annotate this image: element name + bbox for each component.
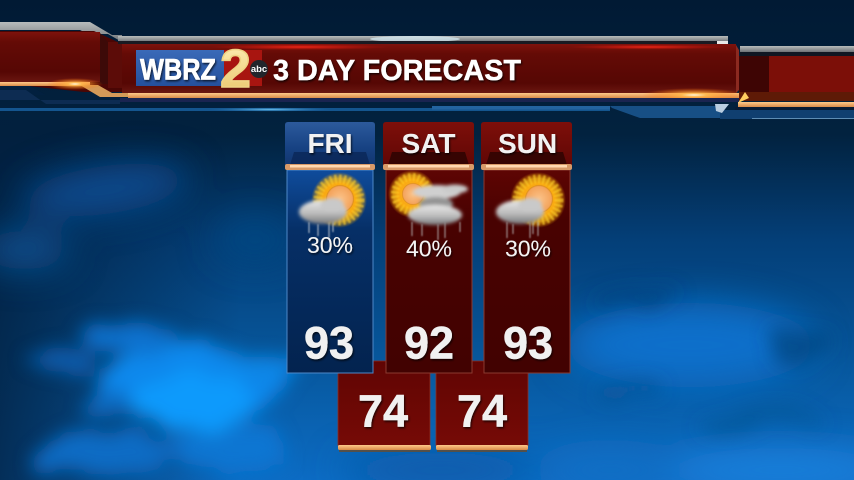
SAT header: SAT bbox=[402, 128, 455, 159]
FRI header bbox=[285, 122, 375, 165]
SAT body bbox=[386, 170, 472, 373]
title banner bbox=[0, 22, 854, 119]
low value: 74 bbox=[457, 386, 507, 436]
logo: WBRZ 2 abc bbox=[136, 39, 268, 99]
icon: sun behind cloud with rain bbox=[496, 172, 566, 238]
SAT high: 92 bbox=[404, 318, 454, 368]
SUN precipitation: 30% bbox=[505, 236, 551, 262]
SUN high: 93 bbox=[503, 318, 553, 368]
banner: lower blue strip bbox=[0, 104, 854, 119]
FRI body bbox=[287, 170, 373, 373]
logo: WBRZ wordmark: WBRZ bbox=[140, 54, 216, 86]
panel: SAT forecast bbox=[383, 122, 474, 373]
SAT header bbox=[383, 122, 474, 165]
logo: abc badge: abc bbox=[251, 64, 267, 75]
icon: sun with storm clouds and rain bbox=[388, 170, 468, 240]
SUN body bbox=[484, 170, 570, 373]
banner: top silver bar bbox=[118, 36, 728, 44]
SUN header bbox=[481, 122, 572, 165]
banner: right segment bbox=[735, 46, 854, 110]
SAT precipitation: 40% bbox=[406, 236, 452, 262]
SUN gold rule bbox=[481, 164, 572, 170]
logo: numeral 2: 2 bbox=[220, 39, 251, 99]
title text: 3 DAY FORECAST bbox=[273, 55, 521, 87]
logo: blue plate bbox=[136, 50, 224, 86]
low value: 74 bbox=[358, 386, 408, 436]
panel: SUN forecast bbox=[481, 122, 572, 373]
panel: low temperature SUN bbox=[436, 361, 528, 452]
SUN header: SUN bbox=[498, 128, 557, 159]
panel: FRI forecast bbox=[285, 122, 375, 373]
banner: left segment bbox=[0, 22, 128, 104]
FRI header: FRI bbox=[307, 128, 353, 159]
banner: gold rule bbox=[120, 88, 748, 102]
FRI precipitation: 30% bbox=[307, 232, 353, 258]
icon: sun behind cloud with rain bbox=[299, 172, 367, 238]
banner: main red panel bbox=[122, 44, 739, 93]
FRI high: 93 bbox=[304, 318, 354, 368]
panel: low temperature SAT bbox=[338, 361, 431, 452]
FRI gold rule bbox=[285, 164, 375, 170]
SAT gold rule bbox=[383, 164, 474, 170]
